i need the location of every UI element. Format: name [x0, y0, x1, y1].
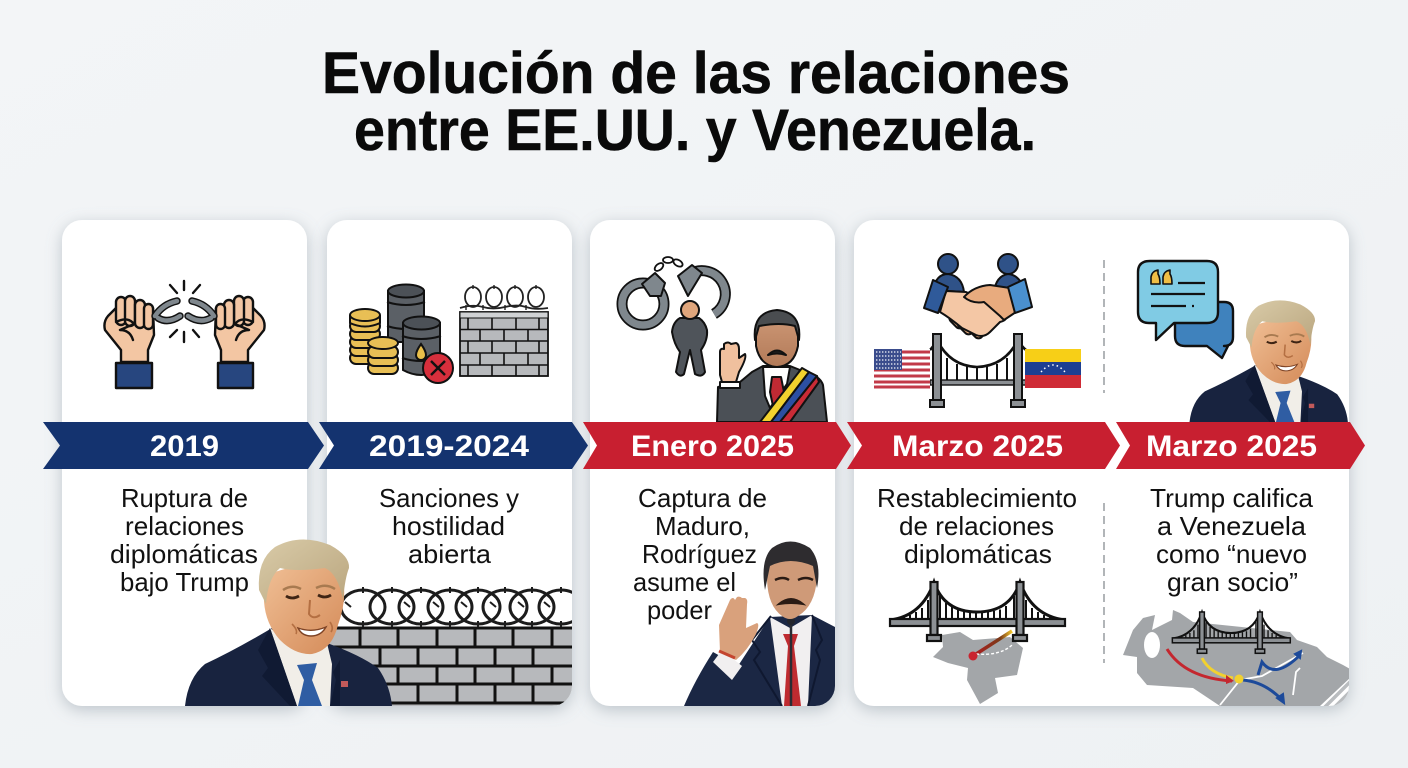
text block: 2019-2024 description: Sanciones y [379, 483, 519, 513]
photo: Trump portrait upper right [1190, 300, 1348, 422]
ribbon: Enero 2025: Enero 2025 [631, 430, 794, 463]
photo: Trump portrait lower left [185, 539, 392, 706]
photo: Maduro portrait raising hand [684, 542, 835, 706]
icon: detained figure [672, 301, 707, 376]
text block: 2019 description: bajo Trump [120, 567, 249, 597]
icon: US flag [874, 349, 930, 388]
text block: nuevo gran socio description: como “nuevo [1156, 539, 1307, 569]
panel: 2019-2024 card [327, 220, 572, 706]
ribbon: Marzo 2025 first: Marzo 2025 [892, 430, 1063, 463]
text block: Enero 2025 description [633, 483, 767, 625]
icon: handcuffs [622, 257, 725, 325]
icon: Maduro cartoon with presidential sash [717, 310, 827, 422]
ribbon: Enero 2025 [583, 422, 851, 469]
ribbon: Marzo 2025 first [847, 422, 1120, 469]
ribbon: 2019: 2019 [150, 430, 219, 463]
divider: lower dashed line [1103, 503, 1105, 663]
text block: 2019 description: Ruptura de [121, 483, 248, 513]
ribbon: 2019-2024 [319, 422, 588, 469]
icon: Venezuelan flag [1025, 349, 1081, 388]
divider: upper dashed line [1103, 260, 1105, 393]
icon: speech bubbles [1138, 261, 1233, 358]
panel: 2019 card [62, 220, 307, 706]
text block: 2019-2024 description: abierta [408, 539, 492, 569]
icon: fists breaking a chain [104, 281, 265, 388]
text block: restablecimiento description: Restablecimiento [877, 483, 1077, 513]
text block: Enero 2025 description: Maduro, [655, 511, 750, 541]
icon: handshake with two figures [924, 254, 1032, 340]
panel: Marzo 2025 double card [854, 220, 1349, 706]
ribbon: 2019-2024: 2019-2024 [369, 430, 529, 463]
title: Evolución de las relaciones [322, 41, 1070, 106]
text block: restablecimiento description: de relaciones [899, 511, 1054, 541]
ribbon: Marzo 2025 second: Marzo 2025 [1146, 430, 1317, 463]
text block: Enero 2025 description: asume el [633, 567, 736, 597]
ribbon: 2019 [43, 422, 324, 469]
text block: Enero 2025 description: poder [647, 595, 712, 625]
ribbon: Marzo 2025 second [1116, 422, 1365, 469]
panel: Enero 2025 card [590, 220, 835, 706]
icon: bridge between US and Venezuelan flags [874, 334, 1081, 407]
text block: nuevo gran socio description [1150, 483, 1314, 597]
text block: nuevo gran socio description: a Venezuela [1157, 511, 1307, 541]
text block: 2019 description [110, 483, 258, 597]
text block: nuevo gran socio description: gran socio” [1167, 567, 1298, 597]
text block: Enero 2025 description: Captura de [638, 483, 767, 513]
title: entre EE.UU. y Venezuela. [354, 98, 1036, 163]
icon: Venezuela map with routes and bridge [1123, 610, 1352, 706]
text block: restablecimiento description [877, 483, 1077, 569]
text block: restablecimiento description: diplomáticas [904, 539, 1052, 569]
text block: Enero 2025 description: Rodríguez [642, 539, 757, 569]
text block: 2019-2024 description [379, 483, 519, 569]
text block: nuevo gran socio description: Trump califica [1150, 483, 1314, 513]
title [322, 41, 1070, 163]
text block: 2019 description: diplomáticas [110, 539, 258, 569]
icon: brick wall with barbed wire [460, 285, 548, 376]
photo barrier: barbed wire and bricks at card bottom [327, 587, 583, 706]
text block: 2019 description: relaciones [125, 511, 244, 541]
text block: 2019-2024 description: hostilidad [392, 511, 505, 541]
icon: oil barrels, coins and sanction mark [350, 284, 453, 383]
icon: lower bridge and Venezuela map [890, 582, 1065, 704]
